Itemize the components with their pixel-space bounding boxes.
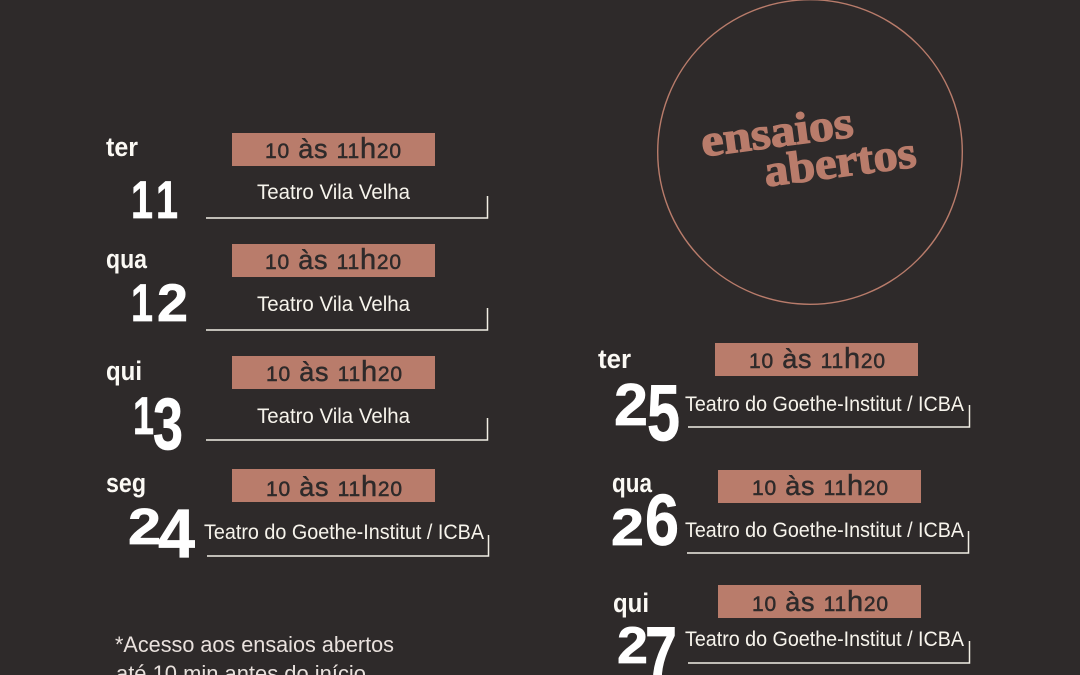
schedule entry: seg 24: 4 [158,495,195,572]
schedule entry: qua 26 [611,468,968,561]
schedule entry: qua 12: 1 [131,274,153,333]
schedule entry: ter 25: Teatro do Goethe-Institut / ICBA [685,393,964,416]
schedule entry: seg 24 [106,468,488,572]
schedule entry: qui 13: 3 [153,384,183,465]
schedule entry: seg 24: 10 às 11h20 [266,471,402,503]
schedule entry: seg 24: seg [106,468,146,498]
schedule entry: qua 12: 2 [157,274,188,333]
schedule entry: ter 11: 10 às 11h20 [265,133,401,165]
schedule entry: ter 25 [598,343,970,457]
badge: ensaios abertos circle: abertos [761,127,919,196]
schedule entry: qua 12: qua [106,244,148,274]
schedule entry: seg 24: Teatro do Goethe-Institut / ICBA [204,521,484,544]
schedule entry: ter 25: ter [598,344,631,374]
schedule entry: qui 27: qui [613,588,649,618]
schedule entry: qui 27: 10 às 11h20 [752,586,888,618]
schedule entry: ter 25: 2 [614,372,648,438]
schedule entry: qui 27 [613,585,970,675]
schedule entry: ter 11 [106,132,488,230]
schedule entry: qua 12: Teatro Vila Velha [257,293,410,316]
schedule entry: qui 13: 10 às 11h20 [266,356,402,388]
schedule entry: qua 12: 10 às 11h20 [265,244,401,276]
schedule entry: ter 11: Teatro Vila Velha [257,181,410,204]
schedule entry: qua 26: Teatro do Goethe-Institut / ICBA [685,519,964,542]
schedule entry: qua 26: 2 [611,499,644,557]
schedule entry: qua 12 [106,244,488,333]
schedule entry: qui 27: 2 [617,617,648,675]
schedule entry: ter 11: 1 [131,171,153,230]
schedule entry: qui 13 [106,356,488,465]
schedule entry: ter 25: 10 às 11h20 [749,343,885,375]
schedule entry: qua 26: 6 [645,481,679,561]
schedule entry: qua 26: 10 às 11h20 [752,470,888,502]
schedule entry: qui 13: Teatro Vila Velha [257,405,410,428]
badge: ensaios abertos circle: ensaios [698,97,856,166]
footnote: *Acesso aos ensaios abertos [115,632,394,657]
schedule entry: qua 26: qua [612,468,653,498]
schedule entry: qui 27: Teatro do Goethe-Institut / ICBA [685,628,964,651]
schedule entry: qui 13: qui [106,356,142,386]
schedule entry: qui 13: 1 [133,387,154,446]
schedule entry: ter 25: 5 [647,368,680,457]
footnote [115,632,394,675]
schedule entry: ter 11: 1 [156,171,178,230]
schedule entry: seg 24: 2 [128,498,161,555]
schedule entry: ter 11: ter [106,132,138,162]
badge: ensaios abertos circle [658,0,962,304]
